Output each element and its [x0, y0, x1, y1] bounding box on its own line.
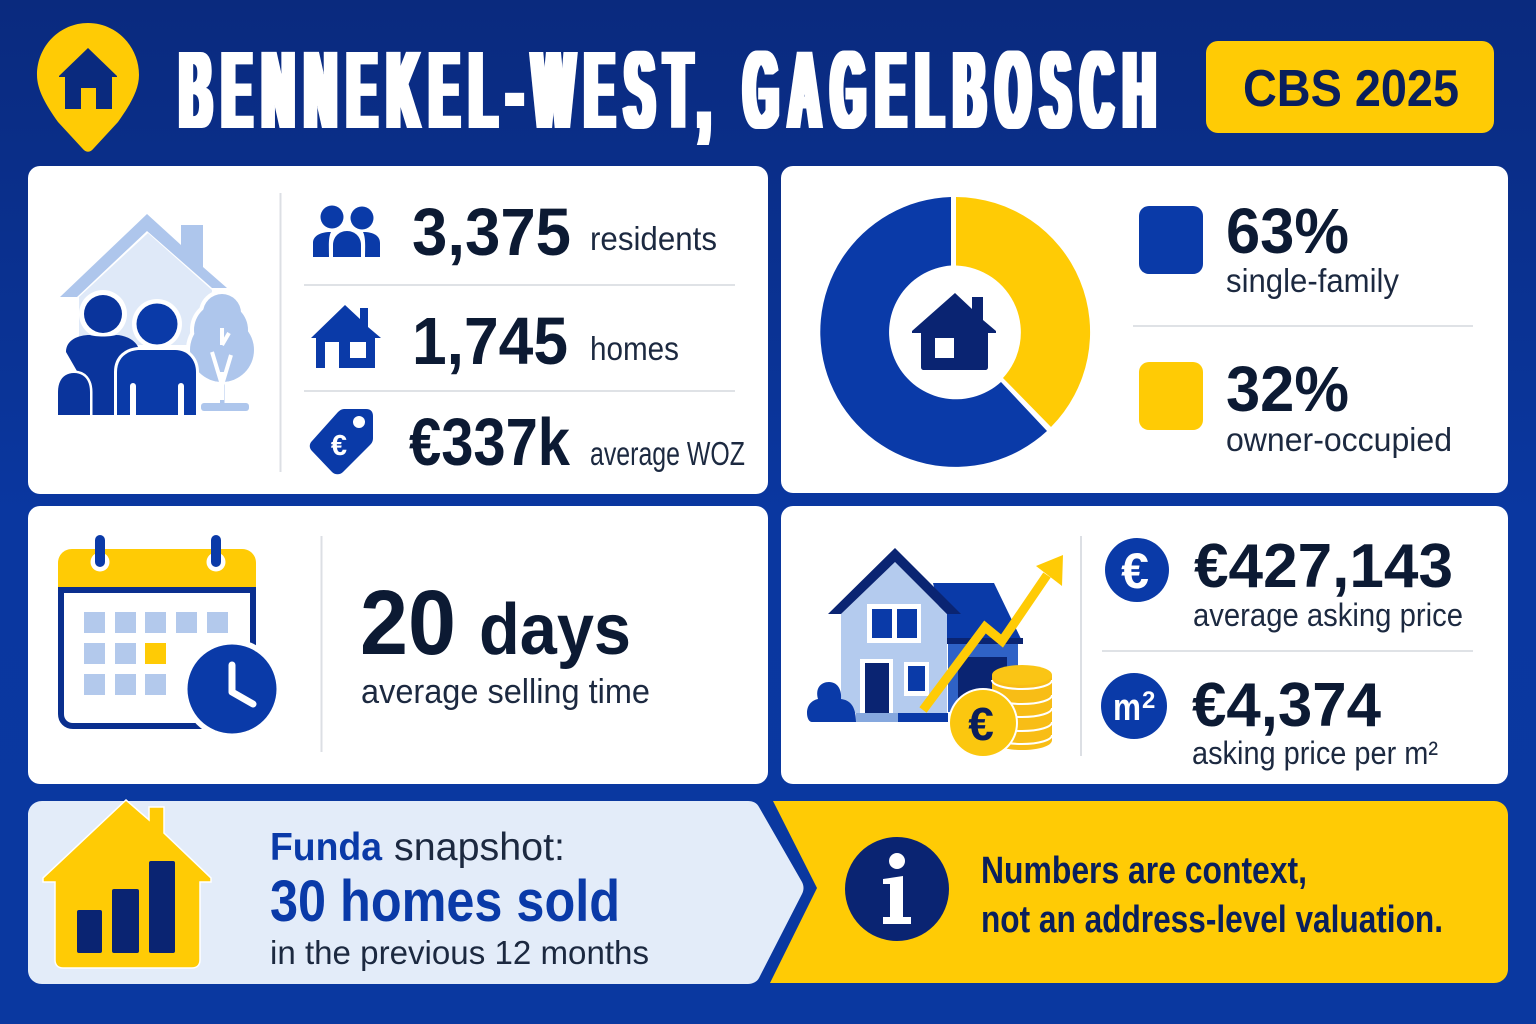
stat: WOZ: average WOZ [590, 435, 745, 472]
icon: price tag [310, 409, 373, 474]
text: Funda snapshot: in the previous 12 months [270, 934, 649, 971]
text: Funda snapshot: 30 homes sold [270, 869, 620, 934]
stat: residents [412, 195, 717, 270]
icon: euro badge: € [1121, 543, 1149, 599]
legend: owner-occupied [1139, 353, 1452, 458]
legend: single-family: 63% [1226, 195, 1349, 267]
icon: family and house [58, 214, 254, 415]
text: disclaimer [981, 850, 1443, 941]
panel: key figures [28, 166, 768, 494]
icon: square metre badge [1101, 673, 1167, 739]
text: disclaimer: Numbers are context, [981, 850, 1307, 892]
badge: CBS 2025: CBS 2025 [1243, 60, 1459, 118]
stat: average asking price: €427,143 [1194, 532, 1453, 601]
stat: asking price per m2: €4,374 [1192, 671, 1382, 740]
badge: CBS 2025 [1206, 41, 1494, 133]
donut chart [820, 197, 1090, 467]
stat: residents: residents [590, 220, 717, 257]
stat: average asking price [1193, 532, 1463, 633]
text: disclaimer: not an address-level valuation. [981, 899, 1443, 941]
stat: residents: 3,375 [412, 195, 571, 270]
icon: house with bar chart [43, 800, 211, 968]
icon: price tag: € [331, 430, 347, 462]
legend: owner-occupied: 32% [1226, 353, 1349, 425]
icon: house with rising arrow and coins [807, 548, 1063, 758]
legend: owner-occupied: owner-occupied [1226, 421, 1452, 458]
stat: WOZ: €337k [409, 405, 571, 480]
stat: homes [412, 304, 679, 379]
icon: house in donut [912, 293, 996, 370]
stat: WOZ [409, 405, 745, 480]
icon: square metre badge: 2 [1142, 687, 1155, 714]
stat: 20 days: days [479, 590, 631, 670]
icon: square metre badge: m [1113, 687, 1141, 729]
stat: asking price per m2: asking price per m² [1192, 735, 1438, 771]
panel: Funda snapshot [28, 800, 804, 984]
stat: 20 days: average selling time [361, 673, 650, 711]
icon: homes [311, 305, 381, 368]
icon: location pin with house [37, 23, 139, 152]
stat: 20 days [360, 572, 650, 711]
icon: calendar with clock [58, 535, 282, 739]
panel: asking price [781, 506, 1508, 784]
stat: average asking price: average asking price [1193, 597, 1463, 633]
icon: euro badge [1105, 538, 1169, 602]
panel: selling time [28, 506, 768, 784]
legend: single-family [1139, 195, 1399, 299]
text: Funda snapshot [270, 826, 649, 971]
icon: house with rising arrow and coins: € [968, 698, 994, 750]
panel: housing mix [781, 166, 1508, 493]
panel: disclaimer [770, 801, 1508, 983]
stat: homes: homes [590, 330, 679, 367]
text: Funda snapshot: snapshot: [394, 826, 565, 869]
stat: 20 days: 20 [360, 572, 456, 674]
stat: homes: 1,745 [412, 304, 568, 379]
legend: single-family: single-family [1226, 262, 1399, 299]
icon: info [845, 837, 949, 941]
text: Funda snapshot: Funda [270, 826, 382, 869]
stat: asking price per m2 [1192, 671, 1438, 771]
icon: residents [313, 206, 380, 257]
